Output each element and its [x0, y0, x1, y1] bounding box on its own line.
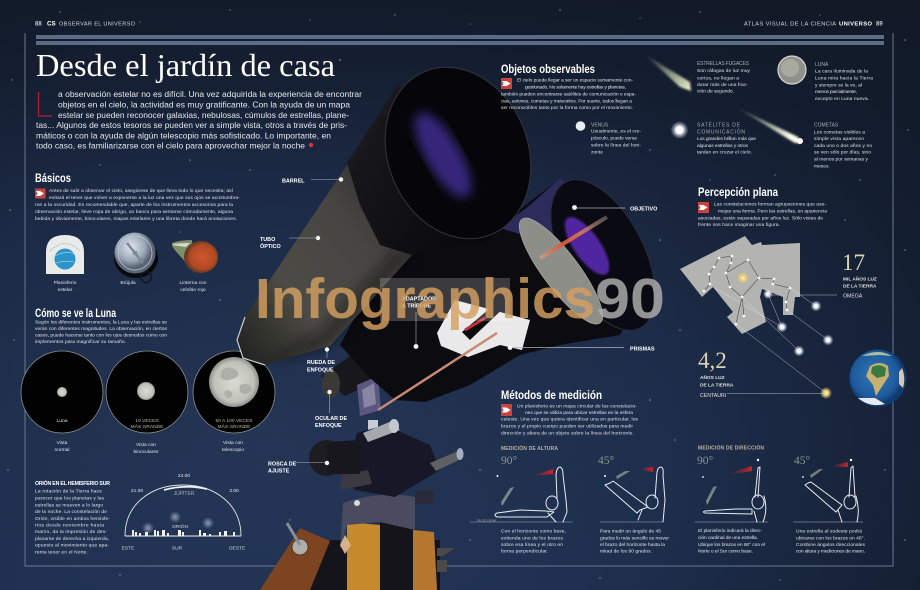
- captions: vistas: [55, 440, 244, 455]
- text: objetos: [501, 78, 636, 111]
- text: direccion 45: Una estrella al sudeste podrá: [796, 528, 862, 534]
- callout: tubo optico: [260, 236, 320, 250]
- text: basicos: bebida y obviamente, binoculares, mapas estelares y una libreta donde hará anotaciones.: [35, 216, 237, 222]
- running head left: 88: [35, 22, 42, 28]
- moon view: telescopio: MÁS GRANDE: [218, 423, 251, 430]
- text: cometas: simple vista aparecen: [814, 136, 864, 142]
- venus: VENUS: [591, 122, 609, 128]
- label: centauri: AÑOS LUZ: [700, 374, 725, 381]
- text: objetos: ser reconocibles tanto por la forma como por el movimiento.: [501, 105, 633, 111]
- focus assembly: [321, 325, 420, 416]
- text: orion: estrellas se mueven a lo largo: [35, 502, 103, 508]
- icon: red arrow: [501, 404, 512, 416]
- text: luna: [815, 62, 873, 102]
- captions: vistas: binoculares: [133, 449, 159, 455]
- text: luna: Luna mira hacia la Tierra: [815, 76, 873, 82]
- captions: instrumentos: Planisferio: [54, 280, 77, 286]
- callout: ocular de enfoque: OCULAR DE: [315, 416, 347, 422]
- text: direccion 90: Norte o el Sur como base.: [698, 548, 753, 554]
- text: objetos: gestionado. No solamente hay estrellas y planetas,: [525, 84, 626, 90]
- panel: percepcion plana: [680, 187, 906, 406]
- venus: [576, 121, 641, 156]
- text: altura 90: sobre esa línea y el otro en: [501, 542, 563, 548]
- label: centauri: [698, 348, 826, 399]
- text: cometas: al menos por semanas y: [814, 156, 869, 162]
- text: luna: verán con diferentes magnitudes. La observación, en ciertos: [35, 326, 168, 332]
- text: luna: Según los diferentes instrumentos, la Luna y las estrellas se: [35, 320, 167, 326]
- figure: direccion 90: [695, 455, 768, 522]
- text: altura 45: mitad de los 90 grados.: [600, 548, 652, 554]
- chart: orion dome: [122, 473, 246, 552]
- captions: instrumentos: estelar: [58, 287, 73, 293]
- text: percepcion: asociadas, están separadas por años luz. Sólo vistas de: [698, 216, 823, 222]
- text: basicos: [35, 188, 240, 222]
- chart: orion dome: 21.00: [131, 488, 143, 494]
- text: luna: [35, 320, 168, 345]
- captions: instrumentos: celofán rojo: [180, 287, 206, 293]
- text: cometas: Los cometas visibles a: [814, 130, 865, 136]
- label: omega: OMEGA: [843, 294, 863, 300]
- heading: basicos: Básicos: [35, 173, 71, 185]
- callout: tubo optico: ÓPTICO: [260, 242, 281, 250]
- text: estrellas fugaces: durar más de una frac-: [697, 82, 748, 88]
- heading: altura: MEDICIÓN DE ALTURA: [501, 444, 558, 452]
- text: direccion 45: ubicarse con los brazos en 45°.: [796, 536, 865, 542]
- callout: ocular de enfoque: ENFOQUE: [315, 423, 342, 429]
- figure: direccion 90: 90°: [697, 455, 714, 467]
- figure: altura 90: Horizonte: [477, 518, 497, 523]
- text: cometas: COMETAS: [814, 122, 839, 128]
- moon view: binoculares: MÁS GRANDE: [131, 423, 164, 430]
- captions: vistas: normal: [55, 447, 69, 453]
- drop cap: [38, 92, 52, 116]
- estrella fugaz: [644, 54, 691, 91]
- text: estrellas fugaces: ESTRELLAS FUGACES: [697, 61, 750, 67]
- text: orion: de la noche. La constelación de: [35, 509, 107, 515]
- moon view: normal: Luna: [57, 418, 68, 424]
- text: metodos: [501, 404, 639, 436]
- callout: rueda de enfoque: [307, 347, 335, 374]
- text: cometas: [814, 122, 872, 170]
- panel: basicos: [35, 173, 240, 293]
- text: satelites: [697, 122, 756, 156]
- text: estrellas fugaces: ción de segundo.: [697, 88, 734, 94]
- text: basicos: observación estelar, lleve ropa de abrigo, un banco para sentarse cómodamente, alguna: [35, 209, 233, 215]
- text: altura 90: extienda uno de los brazos: [501, 536, 564, 542]
- chart: orion dome: OESTE: [229, 546, 246, 552]
- callout: objetivo: OBJETIVO: [630, 206, 657, 212]
- panel: objetos observables: [501, 54, 873, 170]
- captions: vistas: telescopio: [222, 447, 244, 453]
- text: orion: parecer que los planetas y las: [35, 496, 105, 502]
- heading: objetos: Objetos observables: [501, 64, 595, 76]
- callout: prismas: PRISMAS: [630, 346, 655, 352]
- watermark: Infographics: [255, 267, 595, 331]
- figure: altura 45: [598, 455, 665, 522]
- icon: red arrow: [698, 202, 709, 213]
- callout: tubo optico: TUBO: [260, 237, 275, 243]
- text: direccion 90: El planisferio indicará la direc-: [698, 528, 762, 534]
- venus: zonte: [591, 150, 603, 156]
- captions: vistas: Vista con: [223, 440, 243, 446]
- text: luna: implementos para magnificar su tamaño.: [35, 339, 126, 345]
- text: altura 45: grados lo más sencillo es mover: [600, 536, 669, 542]
- callout: barrel: [282, 177, 343, 184]
- heading: metodos: Métodos de medición: [501, 390, 602, 402]
- intro text: máticos o con la ayuda de algún telescopio más sofisticado. Lo importante, en: [36, 130, 331, 140]
- figure: direccion 45: [793, 455, 863, 522]
- label: omega: DE LA TIERRA: [843, 284, 877, 290]
- icon: red arrow: [501, 78, 512, 89]
- text: orion: marzo, da la impresión de des-: [35, 529, 107, 535]
- callout: ocular de enfoque: [315, 390, 347, 429]
- main hood: [347, 45, 556, 261]
- callout: rosca de ajuste: AJUSTE: [268, 468, 290, 474]
- second barrel lens: [500, 163, 677, 347]
- text: orion: rios desde noviembre hasta: [35, 522, 104, 528]
- text: estrellas fugaces: cortos, no llegan a: [697, 76, 739, 82]
- text: luna: menos parcialmente,: [815, 89, 857, 95]
- captions: vistas: Vista: [57, 440, 68, 446]
- text: metodos: celeste. Una vez que quiera identificar una en particular, los: [501, 416, 639, 422]
- text: satelites: COMUNICACIÓN: [697, 128, 745, 136]
- light path: [378, 217, 607, 410]
- text: orion: [35, 479, 110, 556]
- icon: red arrow: [35, 188, 46, 198]
- comet: [734, 106, 803, 144]
- figure: altura 90: 90°: [501, 455, 518, 467]
- text: direccion 45: Combine ángulos direccionales: [796, 542, 866, 548]
- chart: orion dome: SUR: [172, 546, 183, 552]
- chart: orion dome: 24.00: [178, 473, 190, 479]
- text: orion: plazarse de derecha a izquierda,: [35, 536, 109, 542]
- text: direccion 90: ción cardinal de una estrella.: [698, 535, 758, 541]
- text: luna: LUNA: [815, 62, 829, 68]
- moon view: telescopio: 50 A 100 VECES: [216, 418, 253, 424]
- text: cometas: cada uno o dos años y no: [814, 143, 872, 149]
- running head left: [35, 20, 136, 28]
- figure: altura 90: [470, 455, 573, 523]
- text: altura 90: forma perpendicular.: [501, 548, 548, 554]
- text: percepcion: frente nos hace imaginar una figura.: [698, 222, 780, 228]
- label: omega: MIL AÑOS LUZ: [843, 276, 877, 282]
- constellation: [680, 236, 828, 393]
- text: luna: excepto en Luna nueva.: [815, 96, 869, 102]
- text: objetos: también pueden encontrarse satélites de comunicación o espa-: [501, 92, 636, 98]
- stars: [763, 289, 834, 399]
- text: orion: La rotación de la Tierra hace: [35, 488, 102, 494]
- running head left: OBSERVAR EL UNIVERSO: [59, 22, 136, 28]
- intro text: estelar se pueden reconocer galaxias, nebulosas, cúmulos de estrellas, plane-: [58, 110, 349, 120]
- text: satelites: algunas estrellas y otros: [697, 143, 749, 149]
- captions: instrumentos: [54, 280, 207, 293]
- text: luna: y siempre se la ve, al: [815, 82, 862, 88]
- intro text: [36, 89, 362, 150]
- text: orion: opuesto al movimiento que apa-: [35, 542, 109, 548]
- text: orion: Orión, visible en ambos hemisfe-: [35, 516, 110, 522]
- callout: rueda de enfoque: ENFOQUE: [307, 368, 334, 374]
- text: direccion 90: [698, 528, 765, 554]
- label: centauri: DE LA TIERRA: [700, 382, 734, 388]
- icon: linterna: [172, 240, 218, 273]
- main barrel: [237, 165, 412, 365]
- text: basicos: ron a la oscuridad. Es recomendable que, aparte de los instrumentos accesorios para la: [35, 202, 233, 208]
- intro text: tas... Algunos de estos tesoros se pueden ver a simple vista, otros a través de pris-: [36, 120, 347, 130]
- intro text: a observación estelar no es difícil. Una vez adquirida la experiencia de encontrar: [58, 89, 362, 99]
- intro text: todo caso, es familiarizarse con el cielo para aprovechar mejor la noche: [36, 140, 305, 150]
- text: metodos: Un planisferio es un mapa circular de las constelacio-: [517, 404, 637, 410]
- chart: orion dome: 3.00: [229, 488, 239, 494]
- text: direccion 45: [796, 528, 866, 554]
- figure: direccion 45: 45°: [794, 455, 810, 467]
- captions: vistas: Vista con: [136, 442, 156, 448]
- venus: sobre la línea del hori-: [591, 142, 641, 148]
- icon: brujula: [114, 232, 158, 282]
- text: metodos: nes que se utiliza para ubicar estrellas en la esfera: [525, 410, 633, 416]
- moon: [778, 56, 806, 84]
- text: satelites: Los grandes brillan más que: [697, 136, 756, 142]
- callout: adaptador: ADAPTADOR: [402, 296, 436, 302]
- text: luna: casos, puede hacerse tanto con los ojos desnudos como con: [35, 332, 167, 338]
- tripod legs: [260, 522, 455, 590]
- telescope: [237, 45, 677, 590]
- title: Desde el jardín de casa: [36, 47, 335, 83]
- text: altura 45: Para medir un ángulo de 45: [600, 528, 661, 534]
- intro text: objetos en el cielo, la actividad es muy gratificante. Con la ayuda de un mapa: [58, 100, 350, 110]
- running head right: 89: [876, 22, 883, 28]
- text: metodos: dirección y altura de un objeto sobre la línea del horizonte.: [501, 430, 634, 436]
- text: percepcion: [698, 202, 827, 228]
- text: altura 45: [600, 528, 669, 554]
- callouts: telescope parts: [260, 177, 657, 475]
- chart: orion dome: JÚPITER: [174, 490, 195, 497]
- heading: direccion: MEDICIÓN DE DIRECCIÓN: [698, 444, 764, 452]
- text: metodos: brazos y el propio cuerpo pueden ser utilizados para medir: [501, 424, 633, 430]
- icon: planisferio: [46, 235, 84, 274]
- text: orion: ORIÓN EN EL HEMISFERIO SUR: [35, 479, 110, 487]
- text: luna: La cara iluminada de la: [815, 68, 868, 74]
- text: cometas: meses.: [814, 164, 830, 170]
- callout: barrel: BARREL: [282, 178, 305, 184]
- chart: orion dome: ORIÓN: [172, 523, 188, 530]
- text: direccion 45: con altura y mediciones de mano.: [796, 548, 865, 554]
- callout: objetivo: [572, 205, 657, 212]
- satelite: [670, 121, 688, 139]
- text: altura 90: Con el horizonte como base,: [501, 528, 566, 534]
- running head right: ATLAS VISUAL DE LA CIENCIA: [744, 22, 836, 28]
- callout: rosca de ajuste: ROSCA DE: [268, 462, 297, 468]
- text: altura 45: el brazo del horizonte hasta la: [600, 542, 665, 548]
- rear binocular body: [340, 180, 652, 402]
- moon view: normal: [21, 351, 103, 433]
- text: direccion 90: Ubique los brazos en 90° con el: [698, 542, 765, 548]
- captions: instrumentos: Brújula: [120, 280, 136, 286]
- moon view: telescopio: [193, 351, 275, 433]
- chart: orion dome: ESTE: [122, 546, 135, 552]
- watermark: 90: [595, 267, 665, 331]
- moon view: binoculares: [106, 351, 188, 433]
- callout: adaptador: A TRÍPODE: [402, 302, 432, 310]
- callout: prismas: [508, 345, 655, 352]
- panel: metodos de medicion: [470, 390, 866, 554]
- text: percepcion: Las constelaciones forman agrupaciones que ase-: [714, 202, 826, 208]
- mount column: [309, 419, 464, 554]
- figure: altura 45: 45°: [598, 455, 614, 467]
- callout: adaptador: [402, 296, 436, 349]
- captions: instrumentos: Linterna con: [180, 280, 207, 286]
- text: basicos: evitará el tener que volver a exponerse a la luz una vez que sus ojos se acostumbra-: [49, 195, 240, 201]
- venus: Usualmente, es el cre-: [591, 128, 641, 134]
- label: centauri: 4,2: [698, 348, 727, 373]
- text: altura 90: [501, 528, 566, 554]
- text: objetos: cias, aviones, cometas y meteoritos. Por suerte, todos llegan a: [501, 98, 632, 104]
- running head right: [744, 22, 883, 28]
- moon view: binoculares: 10 VECES: [135, 418, 159, 424]
- running head right: UNIVERSO: [839, 22, 872, 28]
- text: estrellas fugaces: Son ráfagas de luz muy: [697, 68, 751, 74]
- text: cometas: se ven sólo por días, sino: [814, 150, 871, 156]
- header stripes: [36, 35, 884, 45]
- label: omega: [768, 250, 877, 300]
- text: objetos: El cielo puede llegar a ser un espacio sumamente con-: [517, 78, 633, 84]
- label: omega: 17: [842, 250, 865, 275]
- text: orion: renta tener en el Norte.: [35, 550, 88, 556]
- callout: rosca de ajuste: [268, 461, 329, 474]
- label: centauri: CENTAURI: [700, 393, 726, 399]
- text: estrellas fugaces: [697, 61, 751, 94]
- venus: púsculo, puede verse: [591, 136, 637, 142]
- text: satelites: SATÉLITES DE: [697, 122, 741, 128]
- heading: luna: Cómo se ve la Luna: [35, 308, 116, 320]
- text: satelites: tardan en cruzar el cielo.: [697, 150, 752, 156]
- heading: percepcion: Percepción plana: [698, 187, 779, 199]
- callout: rueda de enfoque: RUEDA DE: [307, 360, 335, 366]
- panel: como se ve la luna: [21, 308, 275, 455]
- earth: [850, 350, 906, 406]
- prism: [437, 298, 530, 357]
- running head left: CS: [47, 20, 56, 28]
- text: percepcion: mejan una forma. Pero las estrellas, en apariencia: [718, 208, 827, 214]
- text: basicos: Antes de salir a observar el cielo, asegúrese de que lleva todo lo que necesita; así: [49, 188, 234, 194]
